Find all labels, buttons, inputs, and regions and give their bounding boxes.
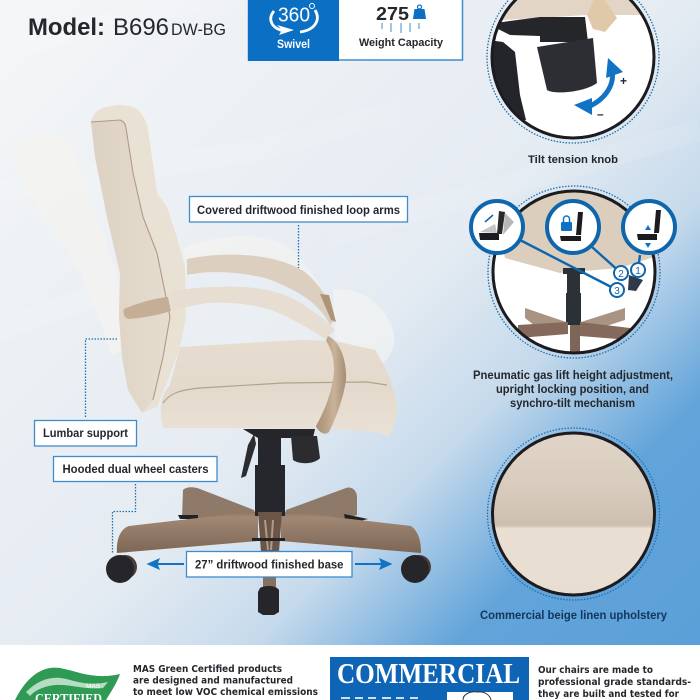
text: MAS green certified: are designed and manufactured bbox=[133, 676, 293, 686]
casters bbox=[106, 555, 431, 615]
knob bbox=[291, 436, 320, 463]
callout: loop arms bbox=[190, 196, 408, 222]
detail circle: mechanism bbox=[471, 186, 675, 358]
icon: height adjustment bbox=[623, 201, 675, 253]
panel: swivel: Swivel bbox=[277, 39, 310, 51]
callout: casters bbox=[54, 456, 217, 482]
text: professional grade bbox=[538, 665, 691, 700]
front right leg bbox=[281, 511, 421, 553]
callout: base width: 27” driftwood finished base bbox=[195, 560, 344, 572]
marker 1: 1 bbox=[635, 266, 641, 277]
detail circle: tilt tension knob bbox=[480, 0, 670, 143]
arrow: tilt direction bbox=[588, 70, 612, 107]
marker 3: 3 bbox=[614, 286, 620, 297]
chair seat bbox=[161, 340, 397, 437]
marker 1 bbox=[631, 263, 645, 277]
panel: swivel: 360 bbox=[278, 4, 310, 26]
panel: swivel bbox=[248, 0, 339, 61]
detail circle: linen upholstery bbox=[488, 428, 660, 600]
logo: commercial: COMMERCIAL bbox=[337, 658, 520, 690]
marker 2: 2 bbox=[618, 269, 624, 280]
text: MAS green certified bbox=[133, 664, 318, 698]
caption: mechanism: synchro-tilt mechanism bbox=[510, 398, 635, 410]
text: MAS green certified: to meet low VOC chemical emissions bbox=[133, 687, 318, 698]
callout: base width bbox=[186, 552, 352, 577]
text: MAS green certified: MAS Green Certified products bbox=[133, 664, 282, 675]
caption: tilt tension knob: Tilt tension knob bbox=[528, 154, 618, 166]
chair back bbox=[91, 105, 186, 413]
front left leg bbox=[117, 511, 258, 553]
text: professional grade: they are built and tested for bbox=[538, 689, 679, 700]
detail circle: tilt tension knob: – bbox=[597, 107, 604, 121]
marker 2 bbox=[614, 266, 628, 280]
caption: linen upholstery: Commercial beige linen upholstery bbox=[480, 610, 668, 622]
wood arm support bbox=[316, 336, 346, 434]
heading: model: DW-BG bbox=[171, 20, 226, 39]
lever knob bbox=[628, 275, 643, 291]
panel: weight capacity bbox=[359, 4, 444, 49]
callout: casters: Hooded dual wheel casters bbox=[62, 464, 208, 476]
ghost chair: reclined position bbox=[14, 132, 394, 365]
text: professional grade: Our chairs are made to bbox=[538, 665, 653, 676]
caption: mechanism: Pneumatic gas lift height adjustment, bbox=[473, 370, 673, 382]
marker 3 bbox=[610, 283, 624, 297]
caption: mechanism bbox=[473, 370, 673, 410]
icon: synchro tilt bbox=[471, 201, 523, 253]
callout: lumbar support: Lumbar support bbox=[43, 428, 128, 440]
caption: mechanism: upright locking position, and bbox=[496, 384, 649, 396]
heading: model bbox=[28, 14, 226, 41]
detail circle: tilt tension knob: + bbox=[620, 74, 627, 88]
logo: MAS certified bbox=[15, 668, 120, 700]
panel: weight capacity: 275 bbox=[376, 4, 409, 24]
back base legs bbox=[182, 487, 254, 526]
arrow: base left bbox=[146, 558, 184, 570]
near armrest bbox=[170, 287, 335, 339]
chair mechanism and base bbox=[106, 429, 431, 615]
heading: model: Model: bbox=[28, 14, 105, 41]
arrow: base right bbox=[355, 558, 392, 570]
chair: side view bbox=[91, 105, 397, 437]
gas cylinder bbox=[255, 437, 285, 516]
dotted leader lines bbox=[86, 225, 298, 553]
spec box: swivel and weight capacity bbox=[248, 0, 462, 61]
connector lines bbox=[520, 240, 640, 290]
footer panel bbox=[0, 645, 700, 700]
callout: loop arms: Covered driftwood finished loop arms bbox=[197, 205, 400, 217]
panel: weight capacity: Weight Capacity bbox=[359, 37, 444, 49]
callout: lumbar support bbox=[34, 420, 136, 446]
logo: commercial bbox=[330, 657, 529, 700]
icon: upright lock bbox=[547, 201, 599, 253]
logo: MAS certified: MAS bbox=[86, 683, 101, 690]
far armrest bbox=[187, 255, 335, 325]
heading: model: B696 bbox=[113, 14, 169, 41]
